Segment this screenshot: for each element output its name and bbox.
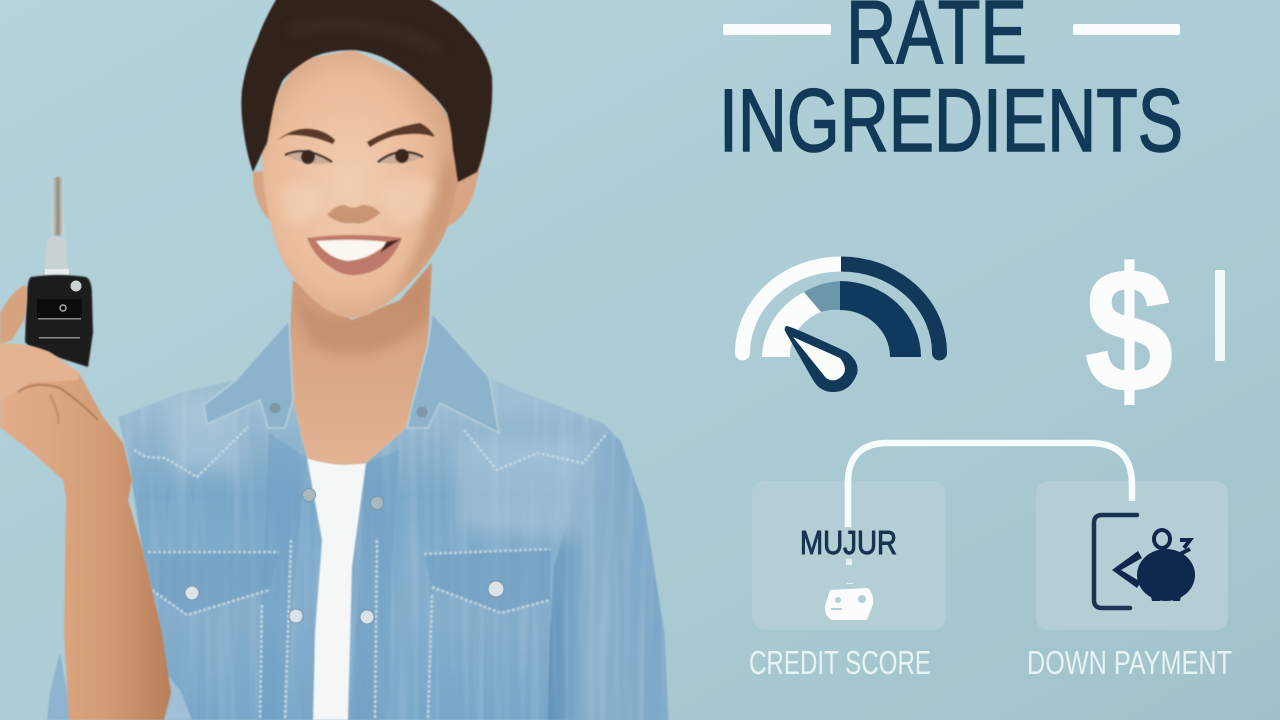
icon: vertical bar: [1215, 270, 1225, 361]
left pocket: [148, 550, 279, 615]
cheek highlights: [282, 159, 457, 292]
gauge needle: [785, 326, 858, 392]
left eye: [285, 150, 332, 164]
hair highlight: [290, 24, 440, 50]
ears: [253, 150, 484, 226]
arm and hand: [0, 343, 171, 720]
icon: small white card: [825, 588, 873, 620]
icon: credit score gauge: [735, 264, 947, 392]
shirt buttons: [185, 403, 504, 624]
panel: down payment card: [1036, 481, 1228, 630]
neck shadow: [296, 270, 430, 354]
title accent line left: [723, 24, 831, 35]
panel: credit score card: [752, 481, 946, 630]
icon: piggy bank: [1112, 530, 1195, 601]
eyebrows: [278, 129, 335, 144]
fingers: [0, 344, 80, 402]
label: credit score: CREDIT SCORE: [749, 644, 931, 681]
face: [262, 50, 458, 318]
person photo illustration: [0, 0, 675, 720]
left collar: [204, 320, 293, 428]
mouth: [307, 235, 402, 275]
neck and chest: [289, 262, 432, 465]
shirt stitching: [134, 427, 607, 720]
nose: [327, 205, 380, 224]
title: [719, 0, 1183, 170]
credit score card contents: [800, 524, 897, 620]
white t-shirt: [307, 458, 366, 720]
right collar: [407, 313, 499, 433]
icon: bracket: [1094, 515, 1137, 608]
connector fragments: [849, 559, 850, 584]
right eye: [378, 149, 423, 164]
down payment card contents: [1094, 515, 1195, 608]
thumb: [0, 285, 27, 344]
card word: MUJUR: [800, 524, 897, 561]
hair: [241, 0, 492, 182]
icon: dollar sign: $: [1085, 232, 1173, 429]
connector arrow: [848, 443, 1132, 527]
denim shirt: [46, 379, 669, 720]
right pocket: [424, 548, 550, 613]
title accent line right: [1073, 24, 1180, 35]
car key fob: [25, 177, 93, 367]
